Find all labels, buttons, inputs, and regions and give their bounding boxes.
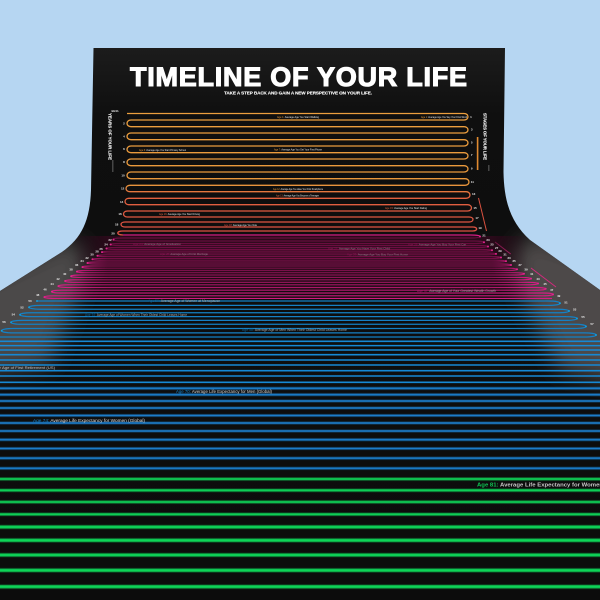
timeline: green lines, lower <box>0 527 600 587</box>
age numbers, right side: 33 <box>507 256 511 260</box>
age numbers, left side: Birth <box>112 109 119 113</box>
age numbers, left side: 12 <box>121 186 125 190</box>
age numbers, left side: 6 <box>123 147 125 151</box>
milestone labels: adult years: Age 47: Average Age of Your Greatest Wealth Growth <box>417 289 496 293</box>
age numbers, right side: 11 <box>471 180 474 184</box>
timeline: green lines, upper <box>0 479 600 514</box>
timeline: adult years, magenta <box>44 235 553 298</box>
age numbers, left side: 38 <box>69 267 73 271</box>
age numbers, right side: 17 <box>475 216 479 220</box>
timeline: blue lines, middle <box>0 341 600 382</box>
age numbers, left side: 2 <box>123 121 125 125</box>
milestone labels: adult years: Age 29: Average Age You Buy Your First Home <box>347 253 408 257</box>
age numbers, left side: 46 <box>43 287 47 291</box>
age numbers, right side: 29 <box>498 249 502 253</box>
age numbers, left side: 52 <box>20 305 24 309</box>
age numbers, left side: 16 <box>118 212 122 216</box>
timeline: childhood and teens, orange to red <box>118 114 477 235</box>
shadow over the magenta lines <box>76 236 524 296</box>
side heading: years of your life: YEARS OF YOUR LIFE <box>108 113 113 160</box>
age numbers, left side: 36 <box>75 263 79 267</box>
stage bar: young adult <box>478 198 486 231</box>
age numbers, right side: 21 <box>482 233 486 237</box>
age numbers, left side: 32 <box>85 256 89 260</box>
magenta turn dots <box>44 236 553 297</box>
age numbers, left side: 40 <box>63 272 67 276</box>
age numbers, right side: 43 <box>536 277 540 281</box>
age numbers, right side: 7 <box>471 153 473 157</box>
timeline: upper blue turns <box>0 301 596 337</box>
age numbers, right side: 35 <box>512 259 516 263</box>
milestone labels: childhood and teens: Age 15: Average Age You Start Dating <box>385 206 427 210</box>
age numbers, right side: 9 <box>471 166 473 170</box>
milestone labels: childhood and teens: Age 16: Average Age You Start Driving <box>159 212 200 216</box>
age numbers, right side: 13 <box>472 192 476 196</box>
age numbers, left side: 54 <box>12 312 15 316</box>
age numbers, left side: 42 <box>56 277 60 281</box>
milestone labels: adult years: Age 27: Average Age You Have Your First Child <box>328 246 390 250</box>
milestone labels: adult years <box>133 242 496 293</box>
age numbers, right side: 3 <box>471 127 473 131</box>
age numbers, left side: 50 <box>28 299 32 303</box>
age numbers, left side: 30 <box>90 252 94 256</box>
age numbers, right side: 25 <box>490 242 494 246</box>
age numbers, right side: 5 <box>471 140 473 144</box>
age numbers, left side: 18 <box>115 222 119 226</box>
milestone labels: childhood and teens: Age 13: Average Age You Become a Teenager <box>276 193 319 197</box>
side heading: stages of your life <box>482 113 489 171</box>
age numbers, left side: 14 <box>120 200 124 204</box>
milestone labels: adult years: Age 25: Average Age You Buy Your First Car <box>408 242 466 246</box>
age numbers, right side: 39 <box>524 267 528 271</box>
age numbers, right side: 41 <box>530 272 534 276</box>
milestone labels: childhood and teens <box>139 115 467 227</box>
age numbers, left side: 10 <box>121 173 125 177</box>
age numbers, right side: 47 <box>550 288 554 292</box>
age numbers, left side: 26 <box>99 247 103 251</box>
age numbers, left side <box>2 109 125 324</box>
age numbers, right side: 55 <box>581 315 585 319</box>
milestone labels: childhood and teens: Age 18: Average Age You Vote <box>224 223 257 227</box>
milestone label: life expectancy men: Age 70: Average Life Expectancy for Men (Global) <box>176 389 273 394</box>
age numbers, right side: 19 <box>478 226 482 230</box>
milestone label: life expectancy women: Age 74: Average Life Expectancy for Women (Global) <box>33 418 145 424</box>
stage bars: adult <box>495 242 556 287</box>
milestone labels: later years <box>0 299 347 370</box>
timeline: blue lines, lower <box>0 388 600 468</box>
blue turn dots <box>2 301 596 335</box>
age numbers, left side: 20 <box>111 231 115 235</box>
age numbers, right side: 37 <box>518 263 522 267</box>
milestone labels: adult years: Age 28: Average Age of First Marriage <box>160 252 208 256</box>
age numbers, left side: 28 <box>95 250 99 254</box>
age numbers, right side: 31 <box>503 252 507 256</box>
age numbers, left side: 8 <box>123 160 125 164</box>
milestone labels: childhood and teens: Age 1: Average Age You Say Your First Word <box>421 115 467 119</box>
age numbers, left side: 44 <box>50 282 54 286</box>
milestone labels: adult years: Age 24: Average Age of Graduation <box>133 242 181 246</box>
title: TIMELINE OF YOUR LIFE <box>130 62 467 92</box>
age numbers, right side: 57 <box>590 322 594 326</box>
age numbers, right side: 27 <box>495 246 499 250</box>
milestone labels: later years: Age 54: Average Age of Women When Their Oldest Child Leaves Home <box>85 313 187 317</box>
age numbers, right side: 1 <box>470 115 472 119</box>
age numbers, left side: 4 <box>123 134 125 138</box>
milestone labels: later years: Age 50: Average Age of Women at Menopause <box>148 299 220 303</box>
stage bar: childhood <box>477 137 478 170</box>
age numbers, right side: 51 <box>564 300 568 304</box>
age numbers, right side: 45 <box>543 282 547 286</box>
age numbers, right side: 53 <box>573 307 577 311</box>
age numbers, right side <box>470 115 594 326</box>
age numbers, right side: 49 <box>557 294 561 298</box>
subtitle: TAKE A STEP BACK AND GAIN A NEW PERSPECTIVE ON YOUR LIFE. <box>224 90 372 95</box>
age numbers, left side: 24 <box>104 242 108 246</box>
age numbers, left side: 56 <box>2 320 6 324</box>
age numbers, left side: 34 <box>80 259 84 263</box>
milestone labels: childhood and teens: Age 6: Average Age You Start Primary School <box>139 148 186 152</box>
age numbers, left side: 22 <box>108 238 112 242</box>
side heading: stages of your life: STAGES OF YOUR LIFE <box>482 113 487 160</box>
milestone labels: childhood and teens: Age 7: Average Age You Get Your First Phone <box>274 147 322 151</box>
milestone labels: later years: Age 58: Average Age of Men When Their Oldest Child Leaves Home <box>242 328 347 332</box>
age numbers, left side: 48 <box>36 293 40 297</box>
milestone labels: childhood and teens: Age 1: Average Age You Start Walking <box>277 115 319 119</box>
milestone labels: childhood and teens: Age 12: Average Age You Have Your First Smartphone <box>273 187 323 191</box>
age numbers, right side: 23 <box>486 238 490 242</box>
age numbers, right side: 15 <box>473 206 477 210</box>
